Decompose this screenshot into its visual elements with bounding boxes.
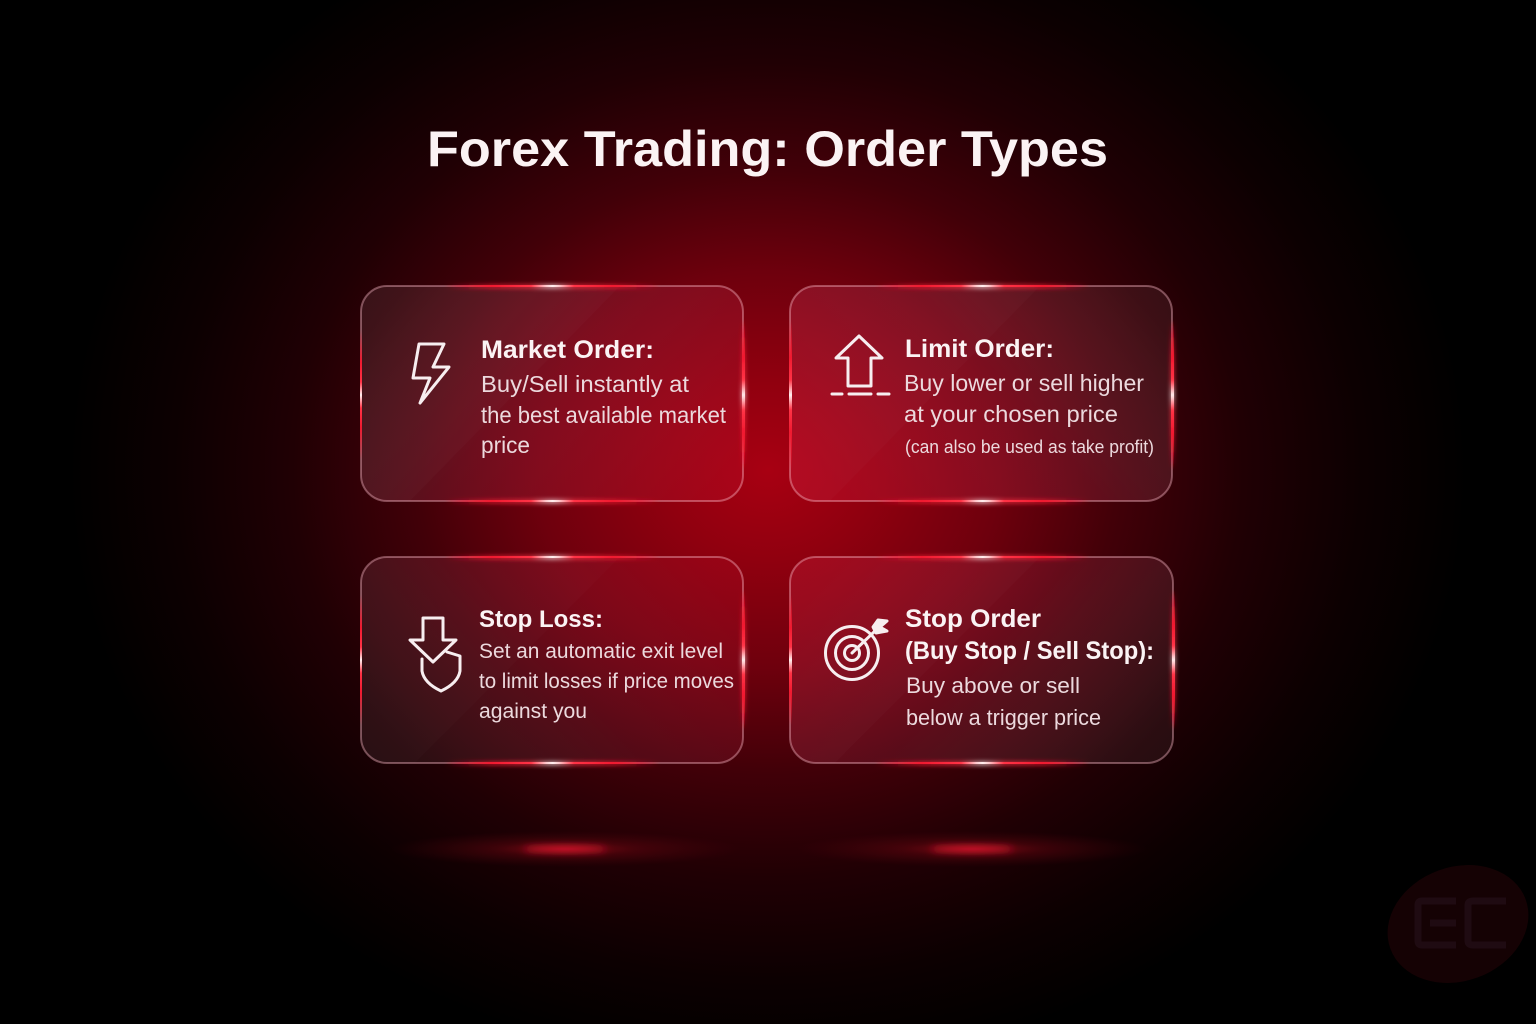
heading: stop order xyxy=(905,605,1154,665)
heading: stop loss: Stop Loss: xyxy=(479,606,603,633)
text: stop order description: Buy above or sell xyxy=(906,673,1080,698)
floor glow: right xyxy=(797,831,1147,867)
text: limit order description: Buy lower or sell higher xyxy=(904,370,1144,396)
heading: limit order: Limit Order: xyxy=(905,335,1054,363)
panel: limit order xyxy=(789,285,1174,503)
text: market order description: price xyxy=(481,432,530,458)
text: stop loss description: against you xyxy=(479,700,587,723)
text: stop loss description: to limit losses if price moves xyxy=(479,670,734,693)
heading: stop order: Stop Order xyxy=(905,605,1041,633)
text: stop order description: below a trigger price xyxy=(906,705,1101,730)
text: limit order description: (can also be used as take profit) xyxy=(905,437,1154,457)
panel: stop order xyxy=(789,556,1175,765)
heading: stop order: (Buy Stop / Sell Stop): xyxy=(905,637,1154,665)
floor glow: left xyxy=(390,831,740,867)
title: Forex Trading: Order Types xyxy=(427,121,1108,177)
text: market order description: Buy/Sell instantly at xyxy=(481,371,690,397)
text: market order description: the best available market xyxy=(481,402,727,428)
panel: market order xyxy=(360,285,745,503)
text: limit order description: at your chosen price xyxy=(904,401,1118,427)
icon: target with arrow xyxy=(826,620,887,680)
text: stop order description xyxy=(906,673,1101,730)
text: limit order description xyxy=(904,370,1154,457)
watermark: EC logo xyxy=(1371,846,1536,1002)
panel: stop loss xyxy=(360,556,745,765)
icon: lightning bolt xyxy=(413,344,449,403)
text: stop loss description: Set an automatic exit level xyxy=(479,640,723,663)
icon: up arrow above dashed line xyxy=(832,336,889,394)
text: market order description xyxy=(481,371,727,458)
icon: down arrow with shield xyxy=(410,618,460,691)
text: stop loss description xyxy=(479,640,734,723)
heading: market order: Market Order: xyxy=(481,336,654,364)
